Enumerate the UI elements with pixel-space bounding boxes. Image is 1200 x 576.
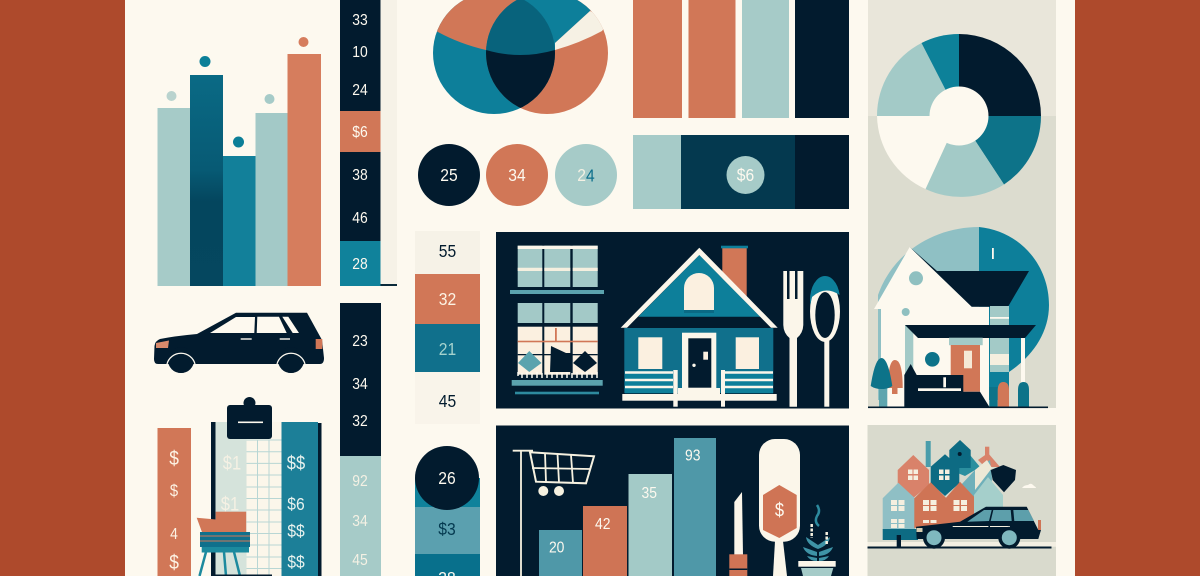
ground strip: [868, 542, 1056, 547]
illustration: modern house with circle: [868, 227, 1049, 408]
icon: trees: [871, 358, 1029, 407]
panel: shopping scene: [496, 426, 849, 576]
icon: house: [621, 246, 778, 407]
donut chart: [877, 34, 1041, 197]
coral dollar column: $: [169, 447, 179, 469]
number column: middle: [415, 231, 480, 424]
number column: middle: 21: [439, 339, 456, 359]
icon: fork: [783, 271, 803, 407]
panel: house scene: [496, 232, 849, 408]
number column: bottom: 32: [352, 412, 368, 430]
panel: donut background: [868, 0, 1056, 408]
icon: clipboard: [227, 397, 272, 439]
number column: bottom: 23: [352, 332, 368, 350]
icon: station wagon: [916, 507, 1041, 549]
number column: bottom: 34: [352, 375, 368, 393]
icon: spatula with price tag: [759, 439, 800, 576]
coral dollar column: $: [169, 551, 179, 573]
venn diagram: [433, 0, 608, 114]
building with clipboard and chair: $$: [287, 521, 305, 541]
horizontal segmented bar: [633, 135, 849, 209]
bar chart: 42: [595, 515, 610, 533]
coral dollar column: [158, 428, 191, 576]
right border band: [1075, 0, 1200, 576]
vertical colour bars: [633, 0, 849, 118]
number column: middle: 32: [439, 289, 456, 309]
icon: upper window: [510, 246, 604, 294]
coral dollar column: 4: [170, 525, 178, 543]
bar chart: 35: [642, 484, 657, 502]
icon: house windows: [891, 470, 967, 528]
number column: top: [340, 0, 397, 286]
coral dollar column: $: [170, 482, 178, 500]
bar chart: [539, 438, 716, 576]
number column: top: 46: [352, 209, 368, 227]
number circles: 25: [440, 165, 458, 185]
horizontal segmented bar: $6: [737, 165, 754, 185]
icon: shopping cart: [513, 451, 594, 576]
number column: top: 38: [352, 166, 368, 184]
number column: middle: 45: [439, 391, 456, 411]
icon: knife: [729, 492, 747, 576]
bar chart: 93: [685, 447, 700, 465]
building with clipboard and chair: $1: [221, 493, 239, 515]
number column: top: 24: [352, 81, 368, 99]
number column: top: 28: [352, 255, 368, 273]
bar chart with dots: [158, 37, 321, 286]
building with clipboard and chair: $$: [287, 452, 305, 474]
icon: lower window with plants: [512, 303, 603, 394]
icon: car: [154, 313, 324, 373]
number circles: [418, 144, 617, 206]
building with clipboard and chair: $$: [287, 552, 305, 572]
icon: spoon: [810, 276, 840, 407]
left border band: [0, 0, 125, 576]
number column: top: 10: [352, 43, 368, 61]
building with clipboard and chair: [197, 397, 322, 576]
number column: bottom: 34: [352, 512, 368, 530]
number column: lower: [415, 446, 480, 576]
number circles: 24: [577, 165, 595, 185]
number column: top: 33: [352, 11, 368, 29]
building with clipboard and chair: $6: [287, 494, 305, 514]
bar chart: 20: [549, 539, 564, 557]
icon: potted plant: [798, 505, 836, 576]
icon: spatula with price tag: $: [775, 499, 784, 521]
number column: bottom: 92: [352, 472, 368, 490]
number column: middle: 55: [439, 241, 456, 261]
illustration: neighbourhood with car: [868, 425, 1056, 576]
number column: bottom: [340, 303, 381, 576]
number circles: 34: [508, 165, 526, 185]
number column: lower: $3: [438, 519, 456, 539]
icon: houses: [883, 440, 1041, 540]
number column: top: $6: [352, 123, 368, 141]
icon: chair: [197, 512, 272, 576]
building with clipboard and chair: $1: [223, 452, 241, 474]
number column: bottom: 45: [352, 551, 368, 569]
number column: lower: 26: [438, 468, 456, 488]
